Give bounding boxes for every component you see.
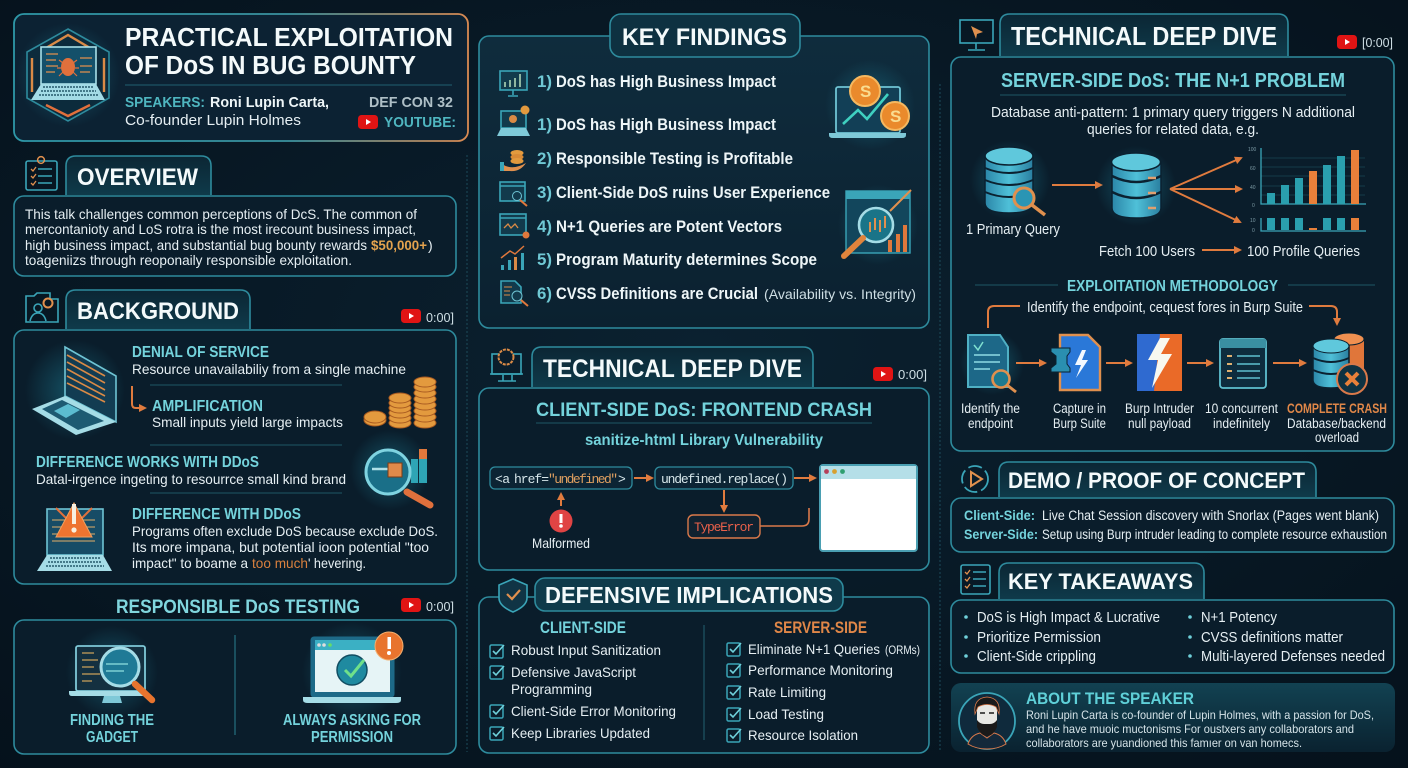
arrow: to amplification [132,386,145,408]
column: server side: (ORMs) [885,645,920,657]
code box: anchor tag: > [618,472,626,487]
list: takeaways left: Prioritize Permission [977,629,1101,646]
timestamp: server side [1337,35,1393,50]
code box: anchor tag: <a [495,472,510,487]
step labels: Database/backend [1287,416,1386,431]
label: primary query: 1 Primary Query [966,221,1060,238]
step labels: Capture in [1053,401,1106,416]
caption: fetch to profile queries [1099,243,1360,260]
icon: burp capture [1051,335,1100,390]
code box: undefined.replace: undefined.replace() [661,472,788,487]
text: overview paragraph: $50,000+ [371,237,427,253]
text: conference and youtube [358,94,456,131]
icon: dashboard with magnifier [838,185,918,265]
caption: fetch to profile queries: Fetch 100 Users [1099,243,1195,260]
list: takeaways left: Client-Side crippling [977,648,1096,665]
list: takeaways right: CVSS definitions matter [1201,629,1343,646]
heading: client-side dos: CLIENT-SIDE DoS: FRONTEND CRASH [536,399,872,421]
icon: laptop with coins [825,60,915,150]
chart: per-query bars: 0 [1252,228,1255,234]
icon: laptop with coins: S [860,82,871,101]
finding: 6 [537,285,916,303]
finding: 6: (Availability vs. Integrity) [764,286,916,302]
icon: code laptop [25,340,125,440]
finding: 2: Responsible Testing is Profitable [556,150,793,168]
arrow: step one to two [1016,362,1045,364]
icon: blank browser window [820,465,917,551]
text: amplification: AMPLIFICATION [152,398,263,415]
timestamp: client side: 0:00] [898,367,927,382]
arrow: step three to four [1187,362,1212,364]
finding: 1 repeated: 1) [537,116,552,134]
column: server side: SERVER-SIDE [774,619,867,637]
text: n+1 description: Database anti-pattern: 1 primary query triggers N additional [991,104,1355,121]
text: finding the gadget [70,712,154,746]
arrow: tag to call [634,477,652,479]
finding: 6: CVSS Definitions are Crucial [556,285,758,303]
text: denial of service: Resource unavailabiliy from a single machine [132,361,406,377]
icon: cursor monitor [960,20,993,50]
text: finding the gadget: GADGET [86,729,138,746]
heading: defensive implications tab: DEFENSIVE IMPLICATIONS [545,582,833,608]
icon: browser pointer [500,214,530,238]
chart: query growth [1248,147,1366,209]
finding: 5: 5) [537,251,552,269]
text: client-side demo: Client-Side: [964,507,1035,523]
column: client side [490,619,676,741]
panel: about the speaker [951,683,1395,752]
icon: malformed alert [550,510,572,532]
step labels: indefinitely [1213,416,1270,431]
chart: query growth: 60 [1250,166,1256,172]
text: amplification: Small inputs yield large impacts [152,414,343,430]
heading: overview tab [66,156,211,195]
icon: document magnifier [501,281,528,306]
icon: hexagon laptop with bug [16,23,120,127]
list: takeaways left [964,609,1160,665]
arrow: malformed up [560,494,562,506]
flow caption with bracket arrows [988,300,1337,328]
panel: key takeaways [951,563,1394,673]
heading: technical deep dive tab: TECHNICAL DEEP DIVE [1011,23,1277,51]
step labels: Burp Intruder [1125,401,1194,416]
icon: warning laptop [37,503,112,571]
heading: background tab: BACKGROUND [77,298,239,325]
icon: coins in hand [500,150,526,171]
timestamp: responsible testing [401,598,454,614]
step labels: endpoint [968,416,1013,431]
finding: 1: 1) [537,73,552,91]
chart: query growth: 100 [1248,147,1257,153]
icon: request list window [1220,339,1266,388]
text: difference works with ddos: DIFFERENCE WORKS WITH DDoS [36,454,259,471]
finding: 4: N+1 Queries are Potent Vectors [556,218,782,236]
heading: technical deep dive tab: TECHNICAL DEEP DIVE [543,355,802,383]
text: overview paragraph: mercontanioty and LoS rotra is the most irecount business impact, [25,221,416,237]
heading: title: PRACTICAL EXPLOITATION [125,24,453,52]
icon: primary database with magnifier [970,140,1050,220]
text: client-side demo: Live Chat Session discovery with Snorlax (Pages went blank) [1042,508,1379,523]
icon: magnifier on chart [350,430,430,510]
icon: coins [364,377,436,428]
text: denial of service: DENIAL OF SERVICE [132,344,269,361]
arrow: primary to fetch [1052,184,1101,186]
code box: undefined.replace [655,467,793,489]
icon: dashboard monitor [500,71,527,96]
text: about: collaborators are yuandioned this famıer on van homecs. [1026,736,1302,750]
icon: burp intruder [1137,334,1182,391]
step labels: overload [1315,430,1359,445]
list: takeaways right: Multi-layered Defenses needed [1201,648,1385,665]
heading: key takeaways tab [999,563,1204,599]
list: takeaways left: DoS is High Impact & Lucrative [977,609,1160,626]
arrow: step four to crash [1273,362,1305,364]
icon: database [1096,146,1176,226]
heading: key takeaways tab: KEY TAKEAWAYS [1008,569,1193,594]
chart: query growth: 40 [1250,185,1256,191]
text: n+1 description [991,104,1355,138]
finding: 1 repeated: DoS has High Business Impact [556,116,776,134]
timestamp: responsible testing: 0:00] [426,599,454,614]
panel: title header [14,14,468,141]
text: about: Roni Lupin Carta is co-founder of Lupin Holmes, with a passion for DoS, [1026,708,1374,722]
flow caption with bracket arrows: Identify the endpoint, cequest fores in Burp Suite [1027,300,1303,316]
icon: person folder [26,293,58,322]
text: overview paragraph: ) [428,237,433,253]
step labels: 10 concurrent [1205,401,1278,416]
arrow: call to browser [794,477,815,479]
step labels: Identify the [961,401,1020,416]
step labels: Burp Suite [1053,416,1106,431]
code box: typeerror [688,515,760,538]
finding: 2: 2) [537,150,552,168]
caption: fetch to profile queries: 100 Profile Queries [1247,243,1360,260]
icon: gear monitor [490,350,523,381]
arrows: fan out [1170,158,1241,222]
step labels [961,401,1387,445]
column: server side: Rate Limiting [748,684,826,700]
timestamp: background: 0:00] [426,310,454,325]
heading: exploitation methodology: EXPLOITATION METHODOLOGY [1067,278,1278,295]
arrow: call to typeerror [723,490,725,511]
heading: demo tab: DEMO / PROOF OF CONCEPT [1008,468,1305,493]
text: difference works with ddos [36,454,346,487]
finding: 3: Client-Side DoS ruins User Experience [556,184,830,202]
code box: anchor tag: "undefined" [548,472,618,487]
text: difference with ddos: too much [252,555,308,571]
text: denial of service [132,344,406,377]
icon: crashed database [1313,333,1367,394]
text: speakers: Co-founder Lupin Holmes [125,112,301,129]
heading: title: OF DoS IN BUG BOUNTY [125,52,416,80]
heading: technical deep dive tab [532,347,813,387]
code box: typeerror: TypeError [694,520,754,535]
text: conference and youtube: YOUTUBE: [384,114,456,131]
text: always asking for permission: PERMISSION [311,729,393,746]
column: client side: CLIENT-SIDE [540,619,626,637]
column: client side: Robust Input Sanitization [511,642,661,658]
text: difference works with ddos: Datal-irgence ingeting to resourrce small kind brand [36,471,346,487]
text: difference with ddos [132,506,438,571]
timestamp: client side [873,367,927,382]
chart: query growth: 0 [1252,203,1255,209]
timestamp: background [401,309,454,325]
timestamp: server side: [0:00] [1362,35,1393,50]
heading: key findings: KEY FINDINGS [622,24,787,51]
finding: 1: DoS has High Business Impact [556,73,776,91]
heading: key findings [610,14,800,57]
icon: laptop with check and alert [302,622,403,722]
finding: 6: 6) [537,285,552,303]
text: overview paragraph: high business impact, and substantial bug bounty rewards [25,237,367,253]
heading: title [125,24,453,80]
column: server side: Performance Monitoring [748,662,893,678]
icon: laptop gear [497,106,530,136]
column: server side [727,619,920,743]
text: always asking for permission: ALWAYS ASKING FOR [283,712,421,729]
icon: checklist [961,565,990,594]
column: client side: Programming [511,681,592,697]
step labels: null payload [1128,416,1191,431]
chart: per-query bars: 10 [1250,218,1256,224]
code box: anchor tag: href= [514,472,549,487]
heading: responsible dos testing: RESPONSIBLE DoS TESTING [116,596,360,618]
finding: 3: 3) [537,184,552,202]
finding: 4: 4) [537,218,552,236]
heading: overview tab: OVERVIEW [77,164,198,191]
text: difference with ddos: Its more impana, but potential ioon potential "too [132,539,429,555]
subheading: sanitize-html: sanitize-html Library Vulnerability [585,432,823,449]
heading: technical deep dive tab [1000,14,1288,56]
text: overview paragraph: This talk challenges common perceptions of DcS. The common of [25,206,417,222]
text: speakers [125,94,329,129]
text: always asking for permission [283,712,421,746]
text: difference with ddos: impact" to boame a [132,555,248,571]
text: speakers: SPEAKERS: [125,94,205,111]
text: conference and youtube: DEF CON 32 [369,94,453,111]
list: takeaways right: N+1 Potency [1201,609,1277,626]
icon: play gear [962,466,988,492]
text: amplification [152,398,343,430]
text: overview paragraph [25,206,433,268]
text: server-side demo: Server-Side: [964,526,1038,542]
text: finding the gadget: FINDING THE [70,712,154,729]
heading: demo tab [999,462,1316,497]
icon: document with magnifier [960,331,1024,395]
panel: defensive implications [479,578,929,753]
icon: rising bars [501,246,524,270]
label: malformed: Malformed [532,535,590,551]
panel: background [14,290,456,584]
text: about [1026,689,1374,750]
column: client side: Keep Libraries Updated [511,725,650,741]
text: overview paragraph: toageniizs through reoponaily responsible exploitation. [25,252,352,268]
icon: monitor with magnifier [66,626,158,718]
panel: technical deep dive server side [951,14,1394,451]
icon: laptop with coins: S [890,107,901,126]
finding: 5: Program Maturity determines Scope [556,251,817,269]
column: server side: Load Testing [748,706,824,722]
list: takeaways right [1188,609,1385,665]
panel: key findings [479,14,929,328]
chart: per-query bars [1250,218,1366,234]
heading: server-side dos: SERVER-SIDE DoS: THE N+1 PROBLEM [1001,70,1345,92]
heading: background tab [66,290,250,329]
arrow: step two to three [1106,362,1131,364]
panel: technical deep dive client side [479,347,929,570]
icon: clipboard [26,157,57,190]
text: speakers: Roni Lupin Carta, [210,94,329,111]
connector: typeerror to browser [760,508,809,526]
panel: demo proof of concept [951,462,1394,552]
text: difference with ddos: DIFFERENCE WITH DDoS [132,506,301,523]
column: client side: Client-Side Error Monitoring [511,703,676,719]
text: n+1 description: queries for related data, e.g. [1087,121,1259,138]
code box: anchor tag [490,467,632,489]
text: about: and he have muoic muctonisms For oustxers any collaborators and [1026,722,1354,736]
panel: responsible dos testing [14,596,456,754]
icon: speaker avatar [959,693,1015,749]
column: server side: Eliminate N+1 Queries [748,641,880,657]
panel: overview [14,156,456,276]
icon: browser magnifier [500,182,527,206]
column: server side: Resource Isolation [748,727,858,743]
icon: shield check [499,579,527,612]
text: difference with ddos: ' hevering. [308,555,366,571]
text: about: ABOUT THE SPEAKER [1026,689,1194,708]
column: client side: Defensive JavaScript [511,664,636,680]
text: difference with ddos: Programs often exclude DoS because exclude DoS. [132,523,438,539]
